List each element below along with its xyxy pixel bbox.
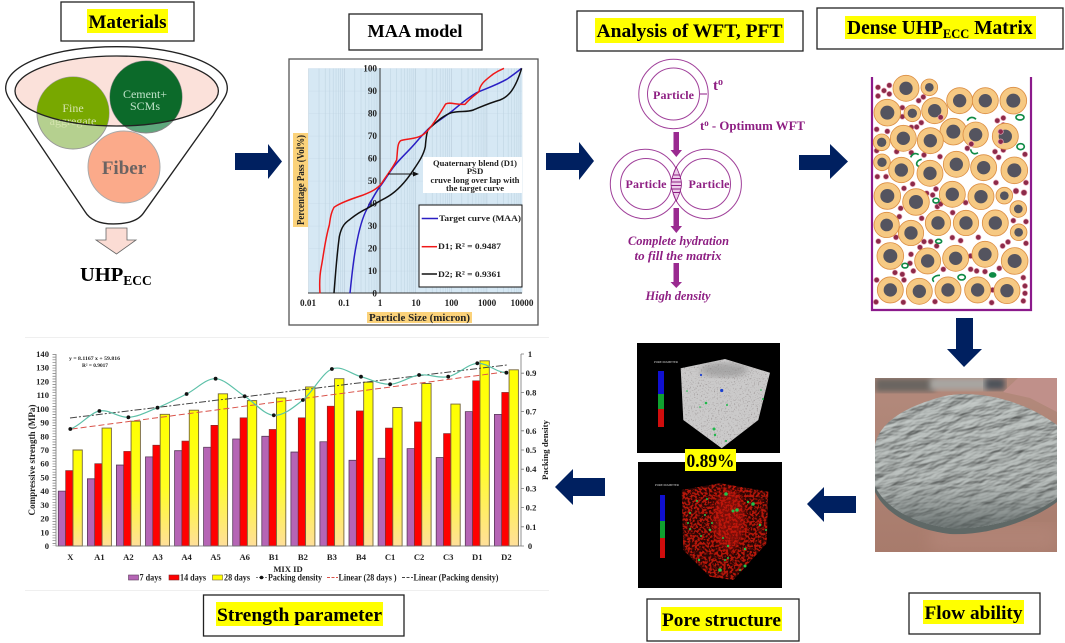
right axis values: 0.6 [526, 426, 537, 436]
category labels: C1 [385, 552, 395, 562]
category labels: A3 [152, 552, 163, 562]
category labels: A4 [181, 552, 193, 562]
category labels: A2 [123, 552, 134, 562]
right axis values: 0.4 [526, 464, 537, 474]
panel: MAA model [289, 14, 538, 325]
arrow: flow ability to pore structure [807, 487, 856, 522]
axes [54, 354, 524, 546]
legend: D2; R² = 0.9361 [438, 269, 501, 279]
x axis values: 1 [378, 298, 383, 308]
left axis values: 140 [36, 349, 49, 359]
grain cores [877, 82, 1023, 298]
right axis values: 0.7 [526, 407, 537, 417]
heading: flow ability [909, 593, 1040, 634]
label: t degrees: t [713, 78, 718, 94]
legend: 14 days [180, 572, 206, 582]
left axis values: 60 [40, 459, 49, 469]
x axis values: 10 [411, 298, 421, 308]
markers: packing density [68, 361, 508, 431]
left axis values: 100 [36, 404, 49, 414]
category labels: B3 [327, 552, 337, 562]
axis title: particle size: Particle Size (micron) [369, 313, 471, 324]
trendline: packing density [70, 365, 507, 418]
right axis values: 1 [528, 349, 532, 359]
callout: quaternary blend [423, 157, 522, 193]
y axis values: 80 [368, 108, 377, 118]
panel: flow ability [875, 378, 1057, 635]
callout: porosity value: 0.89% [686, 451, 734, 472]
curve: target MAA [350, 68, 522, 293]
label: UHP ECC: ECC [123, 273, 152, 288]
legend: Packing density [268, 572, 322, 582]
text: complete hydration: to fill the matrix [634, 249, 722, 263]
y axis values: 0 [372, 288, 377, 298]
heading: dense matrix [817, 8, 1063, 49]
panel: analysis of WFT and PFT [577, 11, 805, 303]
circle: cement and SCMs: SCMs [130, 99, 160, 113]
heading: pore structure [647, 599, 799, 641]
category labels: A6 [239, 552, 251, 562]
right axis values: 0.2 [526, 503, 536, 513]
label: UHP ECC: UHP [80, 264, 123, 286]
heading: MAA model [349, 14, 482, 50]
left axis values: 120 [36, 376, 49, 386]
bar chart: compressive strength [58, 361, 518, 546]
right axis values: 0.5 [526, 445, 536, 455]
callout: quaternary blend: cruve long over lap with [430, 175, 520, 185]
heading: strength parameter [204, 595, 404, 636]
x axis values: 10000 [511, 298, 534, 308]
label: t degrees: o [718, 77, 723, 88]
heading: analysis of WFT, PFT [577, 11, 803, 51]
circle: fiber: Fiber [102, 158, 147, 179]
circle: fine aggregate [37, 77, 109, 149]
regression equation [69, 356, 120, 369]
left axis values: 20 [40, 514, 49, 524]
y axis values: 70 [368, 131, 377, 141]
heading: MAA model: MAA model [368, 21, 462, 41]
left axis values: 110 [37, 390, 49, 400]
y axis values: 30 [368, 221, 377, 231]
left axis values: 40 [40, 486, 49, 496]
arrow: to particle pair [670, 132, 682, 157]
y axis values: 50 [368, 176, 377, 186]
heading: dense matrix: Dense UHP [847, 18, 943, 39]
x axis values: 100 [445, 298, 459, 308]
arrow: funnel output [96, 228, 136, 254]
left axis values: 50 [40, 472, 49, 482]
left axis values: 10 [40, 527, 49, 537]
y axis values: 60 [368, 154, 377, 164]
category labels: C2 [414, 552, 424, 562]
arrow: to hydration [670, 208, 682, 233]
shell grains [873, 75, 1028, 304]
scan: pore network: PORE DIAMETER [655, 484, 680, 487]
y axis values: 90 [368, 86, 377, 96]
left axis values: 80 [40, 431, 49, 441]
circle: fine aggregate: Fine [62, 101, 84, 115]
legend: Linear (28 days ) [338, 572, 396, 582]
scan: pore network [638, 462, 782, 588]
axis title: packing density: Packing density [540, 419, 550, 480]
label: optimum WFT: o [704, 118, 709, 128]
circle: cement and SCMs: Cement+ [123, 87, 167, 101]
heading: strength parameter: Strength parameter [217, 605, 383, 626]
curve: D1 [320, 68, 504, 293]
container [872, 77, 1031, 310]
heading: materials: Materials [88, 12, 167, 33]
right axis values: 0.1 [526, 522, 536, 532]
text: high density: High density [645, 289, 711, 303]
axis title: percentage pass [293, 133, 308, 227]
arrow: matrix to flow ability [947, 318, 982, 367]
left axis values: 0 [45, 541, 49, 551]
panel: strength parameter [25, 338, 550, 636]
callout: quaternary blend: the target curve [446, 183, 504, 193]
panel: dense UHP ECC matrix [817, 8, 1063, 310]
left axis values: 90 [40, 418, 49, 428]
callout: quaternary blend: Quaternary blend (D1) [433, 158, 517, 168]
axis title: mix ID: MIX ID [273, 564, 303, 574]
heading: flow ability: Flow ability [924, 603, 1023, 624]
scan: full specimen: PORE DIAMETER [654, 361, 679, 364]
arrow: to high density [670, 263, 682, 288]
arrow: pore structure to strength [555, 469, 605, 505]
diagram: water film bridge [671, 167, 682, 201]
axis title: compressive strength: Compressive strength (MPa) [27, 404, 38, 516]
x axis values [300, 298, 534, 308]
filler dots [873, 83, 1029, 305]
category labels: B4 [356, 552, 367, 562]
heading: materials [61, 2, 194, 41]
diagram: two particles [610, 149, 741, 219]
right axis values: 0 [528, 541, 532, 551]
diagram: single particle [639, 59, 708, 129]
fibers [902, 115, 1024, 282]
label: left particle: Particle [626, 177, 667, 191]
funnel mouth [15, 56, 218, 126]
arrow: WFT analysis to matrix [799, 144, 848, 179]
axis title: percentage pass: Percentage Pass (Vol%) [296, 135, 307, 225]
circle: fine aggregate: aggregate [50, 114, 96, 128]
x axis values: 0.01 [300, 298, 316, 308]
legend: Target curve (MAA) [439, 213, 521, 223]
category labels [67, 552, 512, 562]
category labels: A1 [94, 552, 105, 562]
category labels: X [67, 552, 74, 562]
heading: dense matrix: ECC [943, 27, 969, 41]
left axis values: 30 [40, 500, 49, 510]
scan: full specimen [637, 343, 780, 453]
left axis values [36, 349, 49, 551]
category labels: D2 [501, 552, 512, 562]
legend: Linear (Packing density) [414, 572, 498, 582]
category labels: B1 [269, 552, 279, 562]
label: right particle: Particle [688, 177, 730, 191]
left axis values: 130 [36, 363, 49, 373]
arrow: MAA model to WFT analysis [546, 142, 594, 180]
y axis values: 40 [368, 198, 377, 208]
circle: fiber [88, 131, 160, 203]
chart frame [25, 338, 549, 590]
x axis values: 1000 [478, 298, 497, 308]
heading: dense matrix: Matrix [969, 18, 1033, 39]
right axis values: 0.9 [526, 368, 536, 378]
category labels: C3 [443, 552, 453, 562]
left axis values: 70 [40, 445, 49, 455]
heading: pore structure: Pore structure [662, 610, 781, 631]
arrow: callout pointer [388, 172, 419, 176]
circle: cement and SCMs [110, 61, 182, 133]
matrix particles [873, 75, 1029, 305]
line: packing density [70, 363, 506, 429]
legend: 28 days [224, 572, 250, 582]
legend: 7 days [140, 572, 162, 582]
label: optimum WFT: - Optimum WFT [709, 118, 805, 133]
right axis values: 0.3 [526, 483, 536, 493]
right axis values [526, 349, 537, 551]
label: optimum WFT: t [700, 118, 704, 133]
regression equation: R² = 0.9017 [82, 363, 108, 369]
callout: quaternary blend: PSD [467, 166, 483, 176]
text: complete hydration [628, 234, 729, 263]
y axis values: 10 [368, 266, 377, 276]
funnel outline [6, 47, 227, 224]
label: particle: Particle [653, 88, 695, 102]
arrow: materials to MAA model [235, 144, 282, 179]
photo: flowing mortar [875, 378, 1057, 552]
chart: particle size distribution [289, 59, 538, 325]
right axis values: 0.8 [526, 387, 537, 397]
y axis values: 100 [363, 64, 377, 74]
panel: pore structure [637, 343, 799, 641]
y axis values [363, 64, 377, 298]
trendline: 28 days [72, 372, 507, 429]
legend [128, 572, 498, 582]
category labels: D1 [472, 552, 483, 562]
y axis values: 20 [368, 244, 377, 254]
legend [419, 205, 522, 287]
text: complete hydration: Complete hydration [628, 234, 729, 248]
legend: D1; R² = 0.9487 [438, 241, 502, 251]
overlapping dots [938, 115, 1003, 147]
category labels: A5 [210, 552, 221, 562]
category labels: B2 [298, 552, 308, 562]
heading: analysis of WFT, PFT: Analysis of WFT, PFT [596, 21, 783, 42]
panel: materials [6, 2, 227, 288]
funnel mouth rim [15, 56, 218, 126]
curve: D2 [334, 68, 522, 293]
x axis values: 0.1 [338, 298, 350, 308]
regression equation: y = 8.1167 x + 59.816 [69, 356, 120, 362]
